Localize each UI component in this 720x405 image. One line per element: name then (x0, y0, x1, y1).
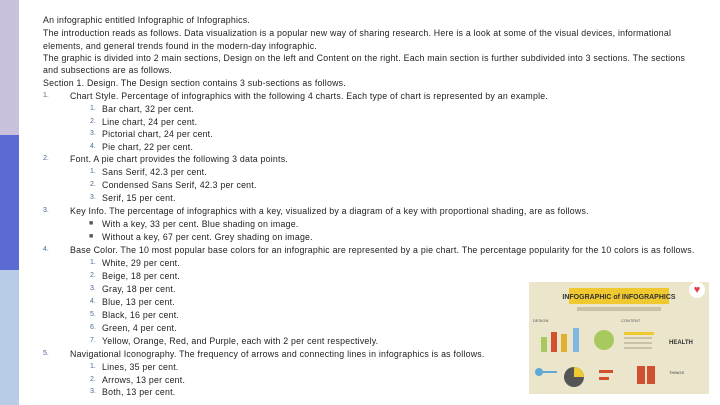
text block: Chart Style. Percentage of infographics with the following 4 charts. Each type of chart is represented by an example. (70, 91, 548, 101)
text block: ■ (89, 220, 93, 227)
banner: INFOGRAPHIC of INFOGRAPHICS (562, 294, 676, 301)
text block: 1. (90, 105, 96, 112)
text block: 2. (90, 118, 96, 125)
text block: Sans Serif, 42.3 per cent. (102, 167, 207, 177)
text block: Line chart, 24 per cent. (102, 117, 197, 127)
text block: The graphic is divided into 2 main sections, Design on the left and Content on the right. Each main section is further subdivided into 3 sections. The sections (43, 53, 685, 63)
text block: Blue, 13 per cent. (102, 297, 175, 307)
text block: An infographic entitled Infographic of Infographics. (43, 15, 250, 25)
text block: 4. (90, 143, 96, 150)
text block: 2. (90, 376, 96, 383)
text block: The introduction reads as follows. Data visualization is a popular new way of sharing research. Here is a look at some of the visual devices, informational (43, 28, 671, 38)
text block: Pictorial chart, 24 per cent. (102, 129, 213, 139)
text block: Condensed Sans Serif, 42.3 per cent. (102, 180, 257, 190)
text block: 2. (90, 272, 96, 279)
text block: 3. (43, 207, 49, 214)
thumbnail infographic (529, 282, 709, 394)
text block: Without a key, 67 per cent. Grey shading on image. (102, 232, 313, 242)
text block: 5. (90, 311, 96, 318)
text block: Lines, 35 per cent. (102, 362, 179, 372)
text block: 3. (90, 285, 96, 292)
icon: heart (689, 282, 705, 298)
text block: 3. (90, 194, 96, 201)
text block: Green, 4 per cent. (102, 323, 177, 333)
text block: and subsections are as follows. (43, 65, 172, 75)
text block: With a key, 33 per cent. Blue shading on image. (102, 219, 298, 229)
text block: 4. (43, 246, 49, 253)
text block: Yellow, Orange, Red, and Purple, each with 2 per cent respectively. (102, 336, 378, 346)
text block: 1. (90, 259, 96, 266)
text block: 7. (90, 337, 96, 344)
text block: Pie chart, 22 per cent. (102, 142, 193, 152)
text block: ■ (89, 233, 93, 240)
text block: 2. (90, 181, 96, 188)
text block: Both, 13 per cent. (102, 387, 175, 397)
text block: Bar chart, 32 per cent. (102, 104, 194, 114)
thumbnail infographic: CONTENT (621, 318, 641, 323)
text block: Black, 16 per cent. (102, 310, 179, 320)
thumbnail infographic: DESIGN (533, 318, 548, 323)
text block: 1. (43, 92, 49, 99)
text block: Section 1. Design. The Design section contains 3 sub-sections as follows. (43, 78, 346, 88)
text block: 1. (90, 363, 96, 370)
text block: Font. A pie chart provides the following 3 data points. (70, 154, 288, 164)
text block: 4. (90, 298, 96, 305)
text block: Beige, 18 per cent. (102, 271, 180, 281)
thumbnail infographic: HEALTH (669, 340, 693, 346)
text block: Navigational Iconography. The frequency of arrows and connecting lines in infographics is as follows. (70, 349, 485, 359)
text block: Serif, 15 per cent. (102, 193, 176, 203)
thumbnail infographic: THINGS (669, 370, 684, 375)
text block: elements, and general trends found in the modern-day infographic. (43, 41, 317, 51)
text block: Arrows, 13 per cent. (102, 375, 185, 385)
text block: 5. (43, 350, 49, 357)
text block: 6. (90, 324, 96, 331)
text block: 1. (90, 168, 96, 175)
text block: Base Color. The 10 most popular base colors for an infographic are represented by a pie chart. The percentage popularity for the 10 colors is as follows. (70, 245, 695, 255)
text block: 3. (90, 130, 96, 137)
text block: Gray, 18 per cent. (102, 284, 176, 294)
left stripe (0, 0, 19, 405)
banner (562, 288, 676, 304)
text block: White, 29 per cent. (102, 258, 180, 268)
text block: 2. (43, 155, 49, 162)
icon: heart: ♥ (694, 284, 700, 296)
text block: 3. (90, 388, 96, 395)
text block: Key Info. The percentage of infographics with a key, visualized by a diagram of a key with proportional shading, are as follows. (70, 206, 589, 216)
